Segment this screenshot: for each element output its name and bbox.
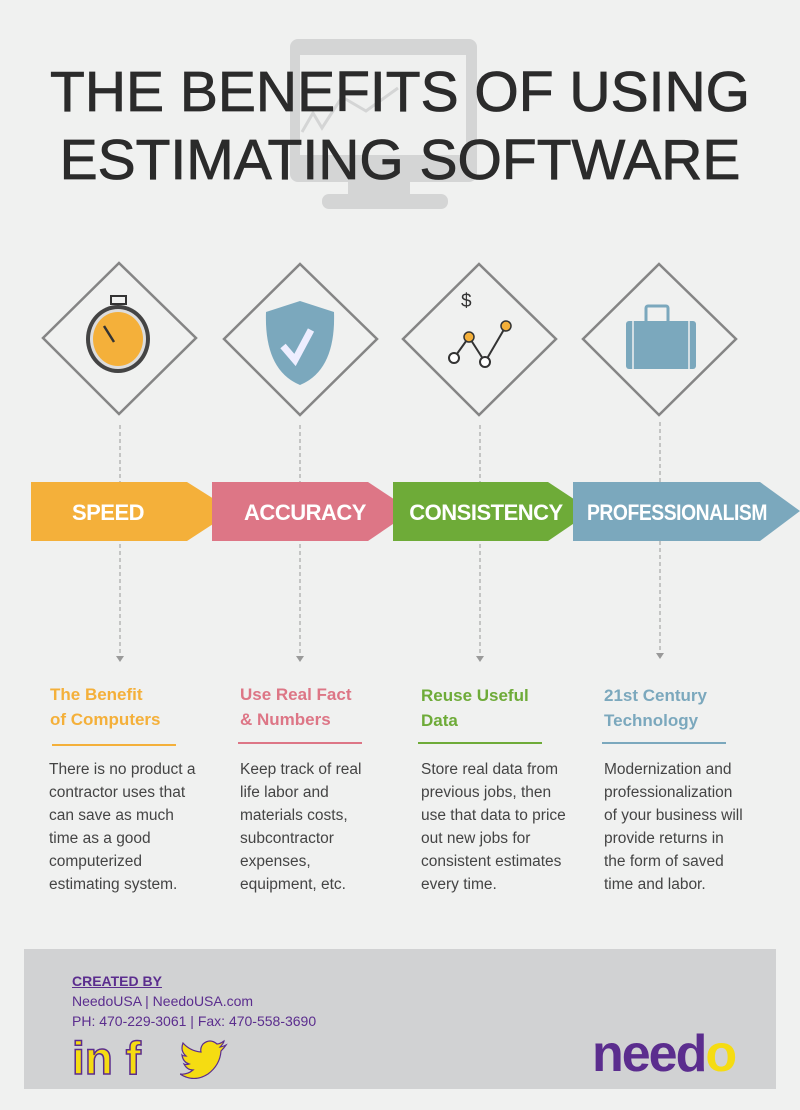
text: & Numbers (240, 710, 331, 729)
text: The Benefit (50, 685, 143, 704)
credits text: PH: 470-229-3061 | Fax: 470-558-3690 (72, 1013, 316, 1029)
text: time and labor. (604, 876, 706, 893)
column 4 (602, 686, 743, 893)
icon: shield (266, 301, 334, 385)
column 3 (418, 686, 566, 893)
text: expenses, (240, 853, 311, 870)
text: There is no product a (49, 761, 195, 778)
credits text: CREATED BY (72, 973, 162, 989)
title: ESTIMATING SOFTWARE (60, 128, 740, 192)
logo: needo (592, 1025, 735, 1083)
text: materials costs, (240, 807, 348, 824)
column 1 (49, 685, 196, 893)
text: of your business will (604, 807, 743, 824)
title (50, 60, 750, 192)
text: out new jobs for (421, 830, 530, 847)
column 2 (238, 685, 362, 893)
text: Technology (604, 711, 698, 730)
icon: briefcase (626, 306, 696, 369)
text: Keep track of real (240, 761, 361, 778)
text: use that data to price (421, 807, 566, 824)
diagram: diamonds, arrows, connectors: SPEED (72, 500, 144, 525)
text: the form of saved (604, 853, 724, 870)
text: subcontractor (240, 830, 334, 847)
text: previous jobs, then (421, 784, 551, 801)
text: Store real data from (421, 761, 558, 778)
social icons: in f (72, 1032, 141, 1084)
text: provide returns in (604, 830, 724, 847)
text: consistent estimates (421, 853, 561, 870)
text: Modernization and (604, 761, 732, 778)
text: Reuse Useful (421, 686, 529, 705)
arrows (31, 482, 233, 541)
diagram: diamonds, arrows, connectors (31, 261, 800, 662)
text: Data (421, 711, 458, 730)
diagram: diamonds, arrows, connectors: ACCURACY (244, 500, 367, 525)
title: THE BENEFITS OF USING (50, 60, 750, 124)
text: estimating system. (49, 876, 177, 893)
text: professionalization (604, 784, 732, 801)
text: computerized (49, 853, 142, 870)
credits text: NeedoUSA | NeedoUSA.com (72, 993, 253, 1009)
diagram: diamonds, arrows, connectors: CONSISTENCY (409, 500, 564, 525)
text: Use Real Fact (240, 685, 352, 704)
icon: stopwatch (86, 296, 150, 373)
social icons (72, 1032, 228, 1084)
footer (24, 949, 776, 1089)
text: 21st Century (604, 686, 707, 705)
background monitor icon (290, 39, 477, 209)
text: can save as much (49, 807, 174, 824)
credits text (72, 973, 316, 1029)
text: contractor uses that (49, 784, 185, 801)
diagram: diamonds, arrows, connectors: PROFESSIONALISM (587, 500, 767, 525)
text: every time. (421, 876, 497, 893)
text: life labor and (240, 784, 329, 801)
text: equipment, etc. (240, 876, 346, 893)
icon: chart: $ (461, 291, 472, 312)
text: of Computers (50, 710, 160, 729)
icon: chart (449, 291, 511, 367)
text: time as a good (49, 830, 151, 847)
